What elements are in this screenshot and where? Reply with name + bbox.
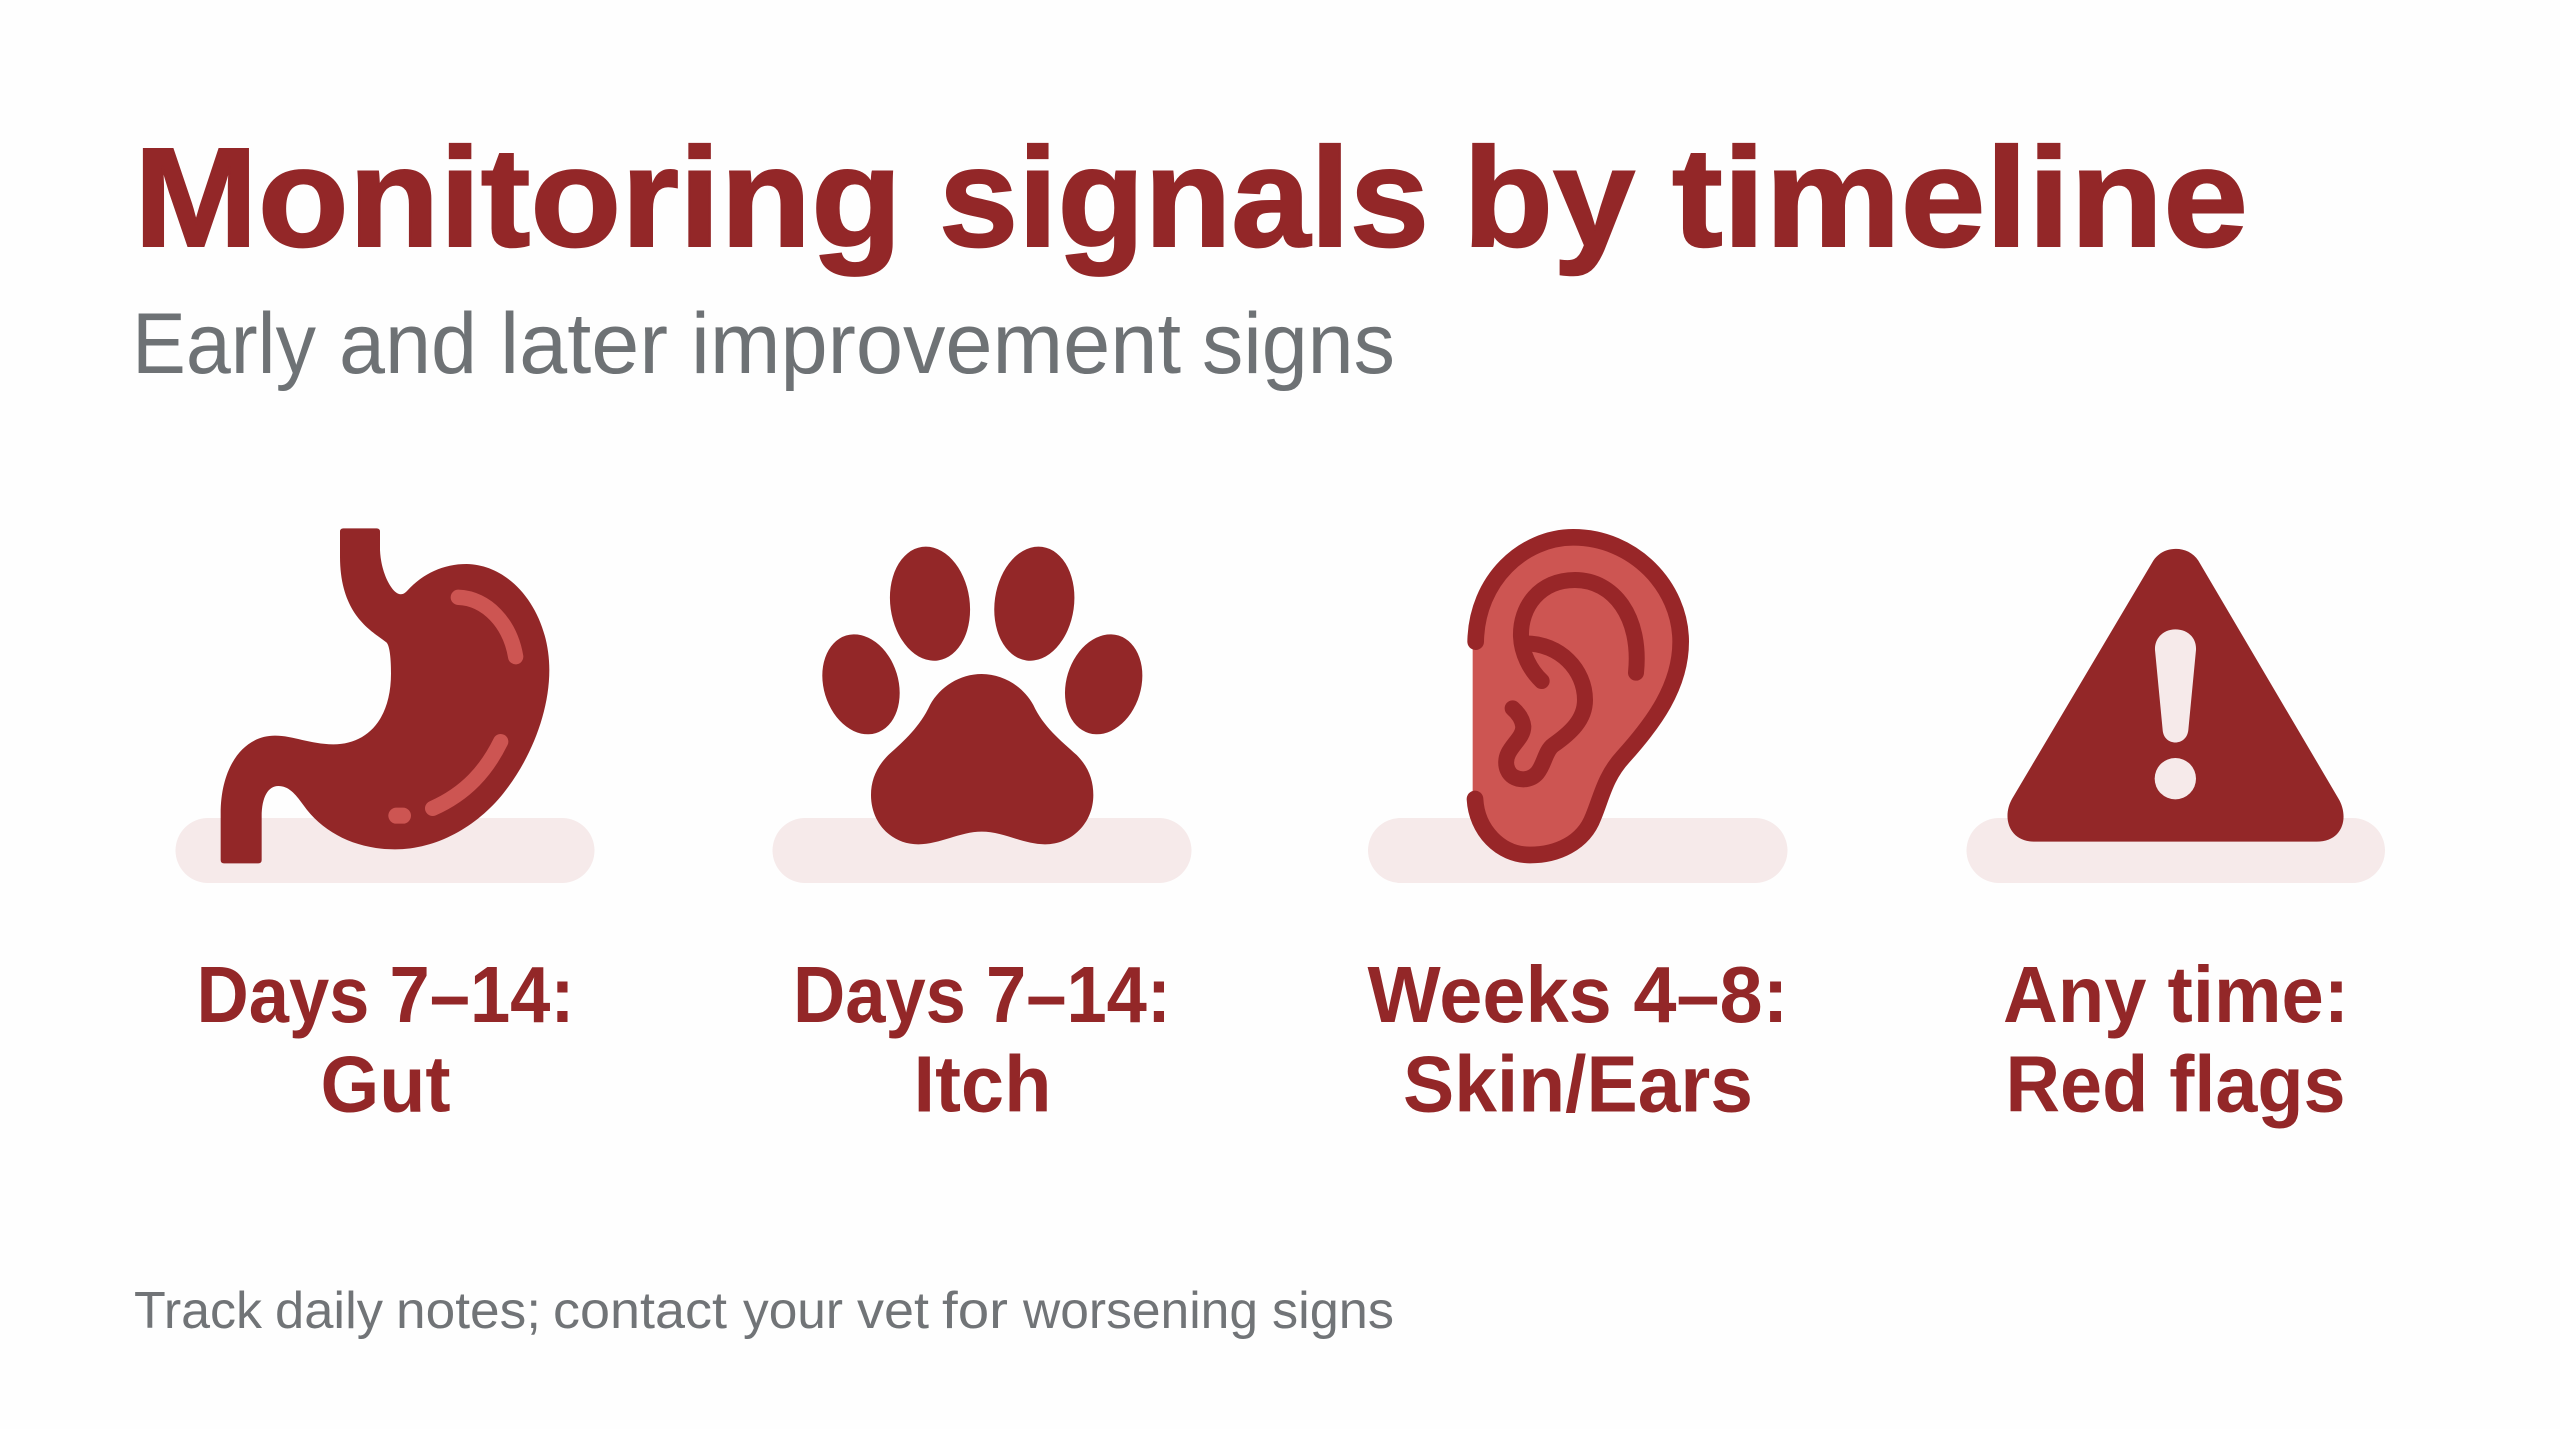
footnote: daily: [275, 1282, 383, 1340]
subtitle: later: [500, 296, 668, 392]
panel: skin and ears: [1368, 537, 1788, 1128]
icon: paw: [810, 541, 1154, 844]
icon: warning triangle: [2007, 549, 2344, 842]
icon shadow: red flags: [1966, 818, 2385, 883]
panel: gut: [176, 528, 594, 1128]
icon: stomach: [221, 528, 549, 863]
panel: itch: [772, 541, 1192, 1128]
label: itch: Itch: [914, 1040, 1052, 1128]
label: skin and ears: Weeks 4–8:: [1368, 950, 1788, 1039]
label: red flags: Red flags: [2006, 1040, 2346, 1128]
label: skin and ears: Skin/Ears: [1403, 1040, 1753, 1128]
subtitle: and: [339, 296, 477, 392]
footnote: signs: [1272, 1282, 1394, 1340]
subtitle: signs: [1202, 296, 1395, 392]
footnote: worsening: [1022, 1282, 1258, 1340]
icon shadow: ears: [1368, 818, 1788, 883]
subtitle: Early: [132, 296, 316, 392]
footnote: Track: [134, 1282, 263, 1340]
label: itch: Days 7–14:: [793, 950, 1171, 1039]
panel: red flags: [1966, 549, 2385, 1128]
footnote: notes;: [396, 1282, 541, 1340]
footnote: for: [942, 1282, 1008, 1340]
title: Monitoring: [134, 118, 902, 276]
title: timeline: [1672, 118, 2248, 276]
icon: ear: [1473, 537, 1682, 855]
subtitle: improvement: [691, 296, 1181, 392]
title: by: [1463, 118, 1635, 276]
label: red flags: Any time:: [2003, 950, 2349, 1039]
label: gut: Days 7–14:: [196, 950, 574, 1039]
icon shadow: itch: [772, 818, 1192, 883]
label: gut: Gut: [320, 1040, 450, 1128]
icon shadow: gut: [176, 818, 594, 883]
footnote: contact: [553, 1282, 728, 1340]
title: signals: [939, 118, 1429, 276]
footnote: vet: [857, 1282, 930, 1340]
footnote: your: [743, 1282, 843, 1340]
